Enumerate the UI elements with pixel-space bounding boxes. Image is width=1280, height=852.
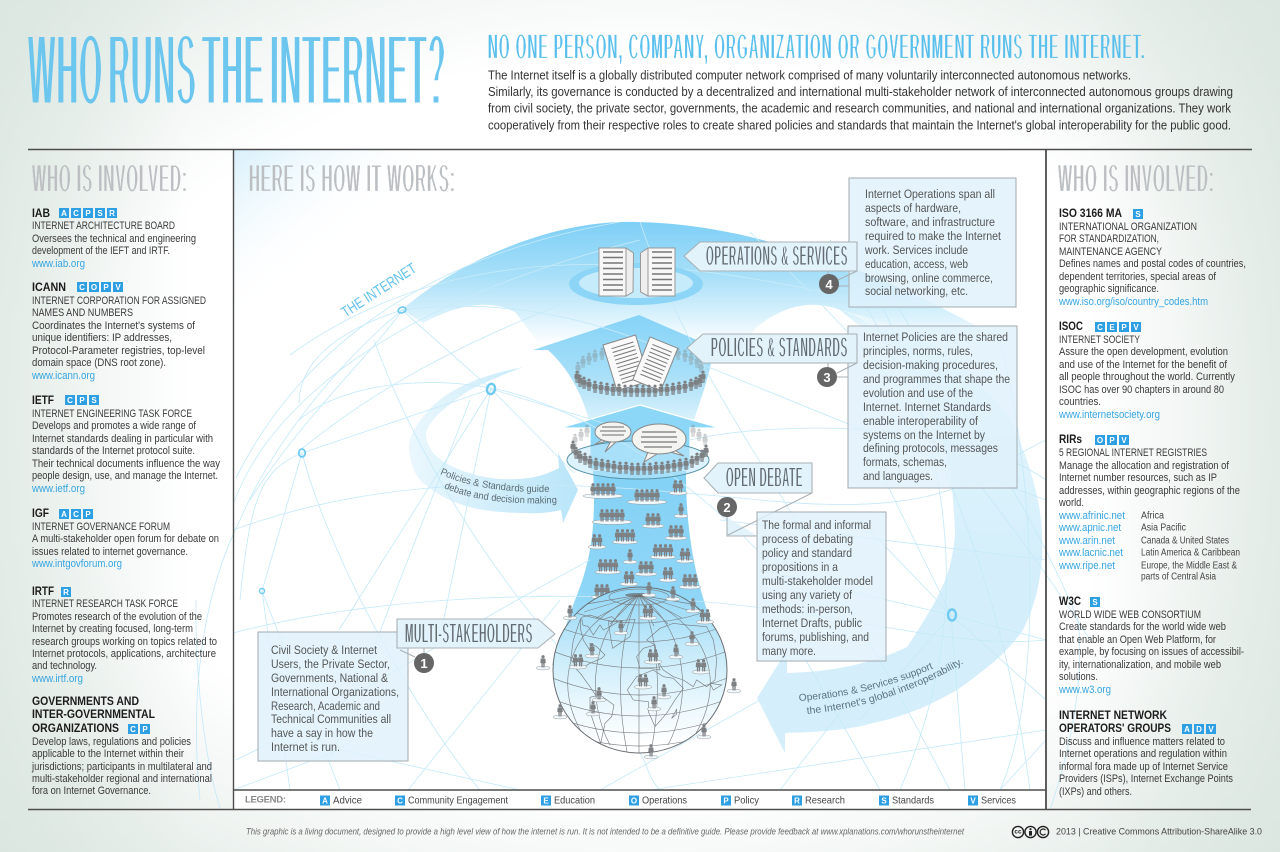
legend: A — [322, 796, 328, 806]
entry: RIRs: Canada & United States — [1141, 536, 1229, 546]
panel: open debate — [727, 493, 886, 661]
entry: W3C: example, by focusing on issues of accessibil- — [1059, 646, 1244, 658]
panel: open debate: forums, publishing, and — [762, 630, 869, 644]
step 3 marker: 3 — [823, 370, 831, 385]
entry: ISO 3166 MA: www.iso.org/iso/country_codes.htm — [1058, 296, 1208, 308]
entry: IAB: R — [109, 209, 115, 218]
entry: ISOC: V — [1133, 323, 1139, 332]
entry: IETF — [31, 395, 220, 495]
arrow: open debate — [560, 405, 720, 470]
entry: governments: fora on Internet Governance. — [32, 785, 151, 797]
entry: ICANN: NAMES AND NUMBERS — [32, 307, 133, 319]
entry: internet network operators groups: OPERATORS' GROUPS — [1059, 723, 1171, 735]
entry: governments: Develop laws, regulations and policies — [32, 736, 191, 748]
entry: IAB: INTERNET ARCHITECTURE BOARD — [32, 220, 175, 232]
legend: E — [543, 796, 549, 806]
entry: internet network operators groups: A — [1184, 725, 1190, 734]
step 3 marker — [817, 363, 857, 387]
panel: multi-stakeholders — [258, 632, 408, 761]
panel: open debate: Internet Drafts, public — [762, 616, 862, 630]
entry: RIRs: Internet number resources, such as IP — [1059, 472, 1217, 484]
entry: IGF: A multi-stakeholder open forum for debate on — [32, 533, 219, 545]
panel: open debate: The formal and informal — [762, 518, 871, 532]
curved caption: operations support interoperability: the Internet's global interoperability. — [806, 660, 963, 714]
entry: ICANN: P — [103, 283, 109, 292]
license text: 2013 | Creative Commons Attribution-ShareAlike 3.0 — [1056, 826, 1262, 838]
entry: ISOC: INTERNET SOCIETY — [1059, 334, 1140, 346]
legend: S — [881, 796, 887, 806]
panel: operations and services: aspects of hardware, — [865, 201, 961, 215]
entry: ISO 3166 MA: dependent territories, special areas of — [1059, 271, 1217, 283]
entry: RIRs: P — [1109, 436, 1115, 445]
text: POLICIES & STANDARDS — [711, 332, 848, 364]
entry: IETF: IETF — [32, 395, 54, 407]
entry: ICANN: INTERNET CORPORATION FOR ASSIGNED — [32, 295, 206, 307]
panel: multi-stakeholders: Internet is run. — [271, 740, 340, 754]
entry: W3C: that enable an Open Web Platform, for — [1059, 634, 1216, 646]
entry: IETF: C — [67, 396, 73, 405]
entry: W3C: S — [1092, 598, 1098, 607]
entry: RIRs: www.ripe.net — [1058, 560, 1115, 572]
icon: operations ring and server documents — [569, 248, 703, 305]
legend: Research — [805, 794, 845, 806]
banner: multi-stakeholders — [397, 618, 555, 650]
entry: IRTF — [31, 586, 217, 685]
entry: IGF: A — [61, 510, 67, 519]
legend: P — [723, 796, 729, 806]
text: WHO IS INVOLVED: — [32, 156, 188, 202]
panel: operations and services: browsing, online commerce, — [865, 271, 993, 285]
panel: open debate: process of debating — [762, 532, 853, 546]
entry: IAB: S — [97, 209, 103, 218]
banner: open debate — [704, 462, 812, 494]
entry: W3C — [1058, 596, 1244, 696]
entry: ISOC — [1058, 321, 1235, 421]
panel: multi-stakeholders: have a say in how the — [271, 726, 373, 740]
entry: RIRs: Latin America & Caribbean — [1141, 548, 1240, 558]
legend: R — [794, 796, 800, 806]
legend: LEGEND: — [245, 794, 286, 806]
entry: ICANN: O — [91, 283, 97, 292]
panel: policies and standards: systems on the Internet by — [863, 428, 986, 442]
panel: open debate: multi-stakeholder model — [762, 574, 873, 588]
entry: IETF: Internet standards dealing in particular with — [32, 433, 213, 445]
network nodes — [260, 306, 956, 620]
entry: ICANN: ICANN — [32, 282, 66, 294]
curved caption: policies guide debate: Policies & Standards guide — [440, 468, 549, 494]
entry: IETF: www.ietf.org — [31, 483, 85, 495]
panel: policies and standards: enable interoperability of — [863, 414, 978, 428]
legend: Community Engagement — [408, 794, 508, 806]
entry: IGF: IGF — [32, 508, 49, 520]
entry: IRTF: and technology. — [32, 660, 97, 672]
entry: RIRs: world. — [1058, 497, 1084, 509]
entry: governments — [31, 696, 212, 797]
entry: ICANN: V — [115, 283, 121, 292]
panel: operations and services: social networking, etc. — [865, 284, 968, 298]
entry: ICANN: www.icann.org — [31, 370, 95, 382]
entry: IAB — [31, 208, 196, 270]
entry: governments: jurisdictions; participants in multilateral and — [31, 761, 212, 773]
entry: IGF: www.intgovforum.org — [31, 558, 122, 570]
legend: Policy — [734, 794, 760, 806]
entry: RIRs: parts of Central Asia — [1141, 572, 1216, 582]
entry: ISO 3166 MA: FOR STANDARDIZATION, — [1059, 233, 1159, 245]
entry: governments: P — [142, 725, 148, 734]
entry: W3C: Create standards for the world wide web — [1059, 621, 1226, 633]
crescent: the internet band — [402, 222, 1012, 352]
icon: creative commons — [1012, 826, 1049, 838]
entry: W3C: www.w3.org — [1058, 684, 1111, 696]
entry: IETF: Develops and promotes a wide range of — [32, 420, 197, 432]
entry: ISOC: C — [1097, 323, 1103, 332]
entry: RIRs: 5 REGIONAL INTERNET REGISTRIES — [1059, 447, 1207, 459]
entry: IETF: Their technical documents influence the way — [32, 458, 220, 470]
entry: ISO 3166 MA: S — [1135, 210, 1141, 219]
entry: IRTF: Internet by creating focused, long-term — [32, 623, 193, 635]
panel: multi-stakeholders: Technical Communities all — [271, 712, 391, 726]
legend: O — [631, 796, 637, 806]
entry: RIRs: Asia Pacific — [1141, 522, 1186, 534]
entry: ICANN: Protocol-Parameter registries, top-level — [32, 345, 205, 357]
entry: ISO 3166 MA: INTERNATIONAL ORGANIZATION — [1059, 221, 1197, 233]
column: stakeholders rising — [552, 430, 727, 665]
panel: open debate: methods: in-person, — [762, 602, 853, 616]
curved caption: policies guide debate — [440, 468, 556, 506]
stakeholder groups in column — [583, 480, 701, 599]
step 2 marker: 2 — [723, 500, 731, 515]
label: the internet: THE INTERNET — [338, 260, 420, 321]
panel: policies and standards: and programmes that shape the — [863, 372, 1010, 386]
legend: Standards — [892, 794, 934, 806]
legend: Advice — [333, 794, 362, 806]
curved caption: operations support interoperability: Operations & Services support — [799, 662, 934, 702]
entry: ISO 3166 MA: MAINTENANCE AGENCY — [1059, 246, 1163, 258]
text: HERE IS HOW IT WORKS: — [249, 156, 456, 202]
entry: governments: ORGANIZATIONS — [32, 723, 119, 735]
step 4 marker — [819, 271, 857, 294]
entry: ISOC: www.internetsociety.org — [1058, 409, 1160, 421]
panel: operations and services: required to make the Internet — [865, 229, 1001, 243]
stakeholder groups on globe — [536, 582, 741, 759]
panel: multi-stakeholders: Governments, National & — [271, 671, 389, 685]
entry: IETF: INTERNET ENGINEERING TASK FORCE — [32, 408, 192, 420]
entry: IAB: A — [61, 209, 67, 218]
step 4 marker: 4 — [825, 277, 833, 292]
entry: ISOC: E — [1109, 323, 1115, 332]
panel: policies and standards: Internet. Internet Standards — [863, 400, 991, 414]
entry: W3C: ity, internationalization, and mobile web — [1059, 659, 1221, 671]
panel: operations and services: work. Services include — [864, 243, 968, 257]
entry: ISOC: ISOC has over 90 chapters in around 80 — [1059, 384, 1224, 396]
entry: internet network operators groups: INTERNET NETWORK — [1059, 710, 1168, 722]
panel: open debate: policy and standard — [762, 546, 852, 560]
entry: IRTF: Promotes research of the evolution of the — [32, 611, 202, 623]
entry: W3C: WORLD WIDE WEB CONSORTIUM — [1059, 609, 1201, 621]
entry: RIRs: V — [1121, 436, 1127, 445]
entry: IAB: C — [73, 209, 79, 218]
node — [397, 306, 407, 314]
entry: W3C: W3C — [1059, 596, 1081, 608]
entry: IGF — [31, 508, 219, 570]
entry: RIRs: Manage the allocation and registration of — [1059, 460, 1230, 472]
entry: IGF: INTERNET GOVERNANCE FORUM — [32, 521, 170, 533]
entry: ISOC: Assure the open development, evolution — [1059, 346, 1228, 358]
node — [948, 610, 956, 620]
entry: IAB: Oversees the technical and engineering — [32, 233, 196, 245]
panel: multi-stakeholders: Research, Academic and — [271, 699, 380, 713]
entry: internet network operators groups: D — [1196, 725, 1202, 734]
entry: IRTF: Internet protocols, applications, architecture — [32, 648, 216, 660]
entry: IRTF: www.irtf.org — [31, 673, 83, 685]
icon: policy documents — [603, 335, 678, 391]
entry: RIRs: RIRs — [1059, 434, 1082, 446]
text: OPEN DEBATE — [726, 462, 803, 494]
entry: RIRs: www.lacnic.net — [1058, 547, 1123, 559]
entry: RIRs: www.apnic.net — [1058, 522, 1121, 534]
entry: ISO 3166 MA: Defines names and postal codes of countries, — [1059, 258, 1246, 270]
panel: open debate: many more. — [762, 644, 816, 658]
entry: RIRs: www.arin.net — [1058, 535, 1115, 547]
entry: IRTF: R — [63, 588, 69, 597]
entry: IETF: standards of the Internet protocol suite. — [32, 445, 195, 457]
text: OPERATIONS & SERVICES — [706, 240, 848, 272]
entry: IGF: P — [85, 510, 91, 519]
entry: governments: multi-stakeholder regional and international — [32, 773, 212, 785]
entry: governments: C — [130, 725, 136, 734]
debate disc with crowd — [567, 425, 709, 479]
entry: IGF: issues related to internet governance. — [32, 546, 188, 558]
entry: ISOC: ISOC — [1059, 321, 1083, 333]
entry: IRTF: IRTF — [32, 586, 54, 598]
panel: operations and services: Internet Operations span all — [865, 187, 995, 201]
entry: ISO 3166 MA — [1058, 208, 1246, 308]
entry: internet network operators groups: informal fora made up of Internet Service — [1059, 761, 1228, 773]
entry: ICANN: C — [79, 283, 85, 292]
network lines — [196, 222, 1090, 810]
panel: policies and standards: decision-making procedures, — [863, 358, 998, 372]
panel: multi-stakeholders: Users, the Private Sector, — [271, 657, 390, 671]
entry: ISOC: and use of the Internet for the benefit of — [1059, 359, 1228, 371]
entry: internet network operators groups: Discuss and influence matters related to — [1059, 736, 1225, 748]
text: MULTI-STAKEHOLDERS — [405, 618, 533, 650]
entry: governments: applicable to the Internet within their — [32, 748, 184, 760]
curved caption: policies guide debate: debate and decision making — [444, 482, 556, 506]
entry: internet network operators groups: (IXPs) and others. — [1059, 786, 1132, 798]
entry: RIRs: www.afrinic.net — [1058, 510, 1125, 522]
entry: ISOC: P — [1121, 323, 1127, 332]
globe — [545, 587, 735, 753]
swirl arrow: operations and services support — [757, 310, 1042, 753]
panel: policies and standards: defining protocols, messages — [863, 441, 998, 455]
entry: IAB: development of the IEFT and IRTF. — [32, 245, 170, 257]
panel: how it works background — [234, 150, 1046, 810]
entry: internet network operators groups: V — [1208, 725, 1214, 734]
legend: Operations — [642, 794, 687, 806]
entry: ICANN: Coordinates the Internet's systems of — [32, 320, 196, 332]
entry: IETF: P — [79, 396, 85, 405]
panel: policies and standards: evolution and use of the — [863, 386, 973, 400]
banner: operations and services — [684, 240, 857, 272]
entry: IETF: people design, use, and manage the Internet. — [32, 470, 218, 482]
panel: policies and standards: Internet Policies are the shared — [863, 330, 1008, 344]
entry: RIRs: Europe, the Middle East & — [1141, 560, 1237, 572]
entry: RIRs: O — [1097, 436, 1103, 445]
entry: IGF: C — [73, 510, 79, 519]
entry: ISO 3166 MA: ISO 3166 MA — [1059, 208, 1122, 220]
entry: RIRs: addresses, within geographic regions of the — [1059, 485, 1240, 497]
step 1 marker — [400, 648, 434, 673]
legend: C — [397, 796, 403, 806]
crowd ring: policies front row — [574, 371, 706, 397]
entry: IRTF: INTERNET RESEARCH TASK FORCE — [32, 598, 178, 610]
panel: policies and standards: principles, norms, rules, — [863, 344, 973, 358]
panel: operations and services: software, and infrastructure — [865, 215, 995, 229]
footer note: This graphic is a living document, designed to provide a high level view of how the internet is run. It is not intended to be a definitive guide. Please provide feedback at www.xplanations.com/whorunstheinternet — [246, 826, 964, 838]
entry: internet network operators groups: Providers (ISPs), Internet Exchange Points — [1059, 773, 1233, 785]
legend: Education — [554, 794, 595, 806]
frame lines — [28, 150, 1252, 810]
entry: ICANN — [31, 282, 206, 382]
entry: ISO 3166 MA: geographic significance. — [1059, 283, 1159, 295]
entry: IRTF: research groups working on topics related to — [32, 636, 217, 648]
panel: open debate: using any variety of — [762, 588, 852, 602]
entry: RIRs: Africa — [1141, 510, 1165, 522]
node — [486, 383, 496, 395]
entry: ISOC: all people throughout the world. Currently — [1059, 371, 1235, 383]
entry: ISOC: countries. — [1059, 396, 1101, 408]
entry: IAB: IAB — [32, 208, 50, 220]
entry: internet network operators groups: Internet operations and regulation within — [1059, 748, 1227, 760]
node — [299, 449, 305, 457]
intro paragraph: The Internet itself is a globally distributed computer network comprised of many voluntarily interconnected autonomous networks. — [488, 68, 1131, 82]
entry: IETF: S — [91, 396, 97, 405]
legend: Services — [981, 794, 1016, 806]
entry: governments: GOVERNMENTS AND — [32, 696, 139, 708]
intro paragraph — [488, 68, 1233, 132]
entry: ICANN: unique identifiers: IP addresses, — [32, 332, 172, 344]
panel: operations and services: education, access, web — [865, 257, 968, 271]
legend: V — [970, 796, 976, 806]
swirl arrow: policies and standards guide — [409, 367, 578, 523]
panel: open debate: propositions in a — [762, 560, 838, 574]
entry: IAB: P — [85, 209, 91, 218]
icon: creative commons: cc — [1014, 828, 1022, 836]
step 2 marker — [717, 497, 737, 517]
icon: speech bubbles — [594, 422, 686, 462]
entry: ICANN: domain space (DNS root zone). — [32, 357, 166, 369]
panel: multi-stakeholders: International Organizations, — [271, 685, 399, 699]
panel: policies and standards: and languages. — [863, 469, 933, 483]
panel: policies and standards: formats, schemas, — [863, 455, 947, 469]
panel: multi-stakeholders: Civil Society & Internet — [271, 643, 377, 657]
arrow: policies and standards — [533, 315, 720, 423]
entry: W3C: solutions. — [1059, 671, 1098, 683]
entry: IAB: www.iab.org — [31, 258, 85, 270]
entry: internet network operators groups — [1059, 710, 1233, 798]
panel: policies and standards — [848, 326, 1017, 488]
entry: RIRs — [1058, 434, 1240, 582]
legend — [245, 794, 1016, 806]
panel: operations and services — [849, 178, 1016, 307]
banner: policies and standards — [687, 332, 857, 364]
crowd ring: policies back row — [575, 348, 704, 374]
entry: governments: INTER-GOVERNMENTAL — [32, 709, 155, 721]
step 1 marker: 1 — [420, 656, 428, 671]
node — [260, 588, 264, 594]
